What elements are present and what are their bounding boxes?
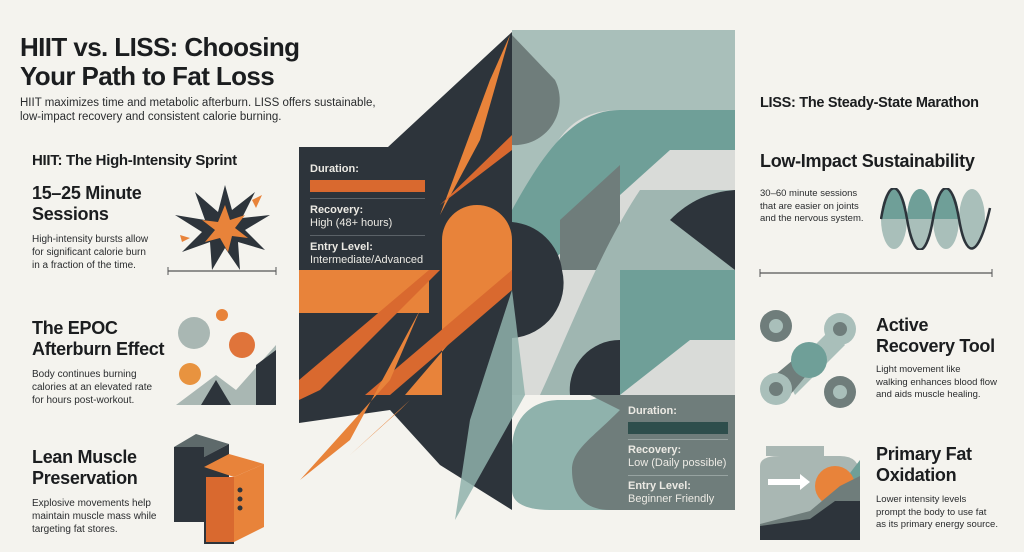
- block: primary fat: as its primary energy source.: [876, 519, 998, 530]
- subtitle: low-impact recovery and consistent calorie burning.: [20, 111, 281, 123]
- HIIT info box: [310, 163, 425, 266]
- block: low-impact: 30–60 minute sessions: [760, 188, 857, 199]
- block: lean muscle: [32, 447, 156, 535]
- block: primary fat: [876, 444, 998, 530]
- title: [20, 32, 299, 91]
- block: EPOC: calories at an elevated rate: [32, 382, 152, 393]
- block: lean muscle: maintain muscle mass while: [32, 511, 156, 522]
- title: Your Path to Fat Loss: [20, 61, 274, 91]
- block: lean muscle: Preservation: [32, 468, 137, 488]
- HIIT info box: High (48+ hours): [310, 217, 392, 229]
- heading: HIIT: HIIT: The High-Intensity Sprint: [32, 152, 237, 169]
- block: primary fat: prompt the body to use fat: [876, 506, 986, 518]
- scale line: [168, 267, 276, 275]
- block: EPOC: Body continues burning: [32, 369, 137, 380]
- block: active recovery: walking enhances blood flow: [876, 376, 997, 388]
- title: HIIT vs. LISS: Choosing: [20, 32, 299, 62]
- heading: LISS: LISS: The Steady-State Marathon: [760, 95, 979, 111]
- icon: chain: [760, 310, 856, 408]
- block: lean muscle: targeting fat stores.: [32, 524, 118, 535]
- block: 15-25 minute: [32, 183, 148, 271]
- HIIT info box: Entry Level:: [310, 241, 373, 253]
- block: 15-25 minute: 15–25 Minute: [32, 183, 141, 203]
- LISS info box: Beginner Friendly: [628, 493, 714, 505]
- subtitle: HIIT maximizes time and metabolic afterburn. LISS offers sustainable,: [20, 97, 376, 109]
- HIIT info box: Duration:: [310, 163, 359, 175]
- LISS info box: Duration:: [628, 405, 677, 417]
- block: primary fat: Lower intensity levels: [876, 494, 966, 505]
- icon: blocks: [174, 434, 264, 544]
- block: low-impact: and the nervous system.: [760, 213, 864, 224]
- block: 15-25 minute: High-intensity bursts allow: [32, 234, 148, 245]
- block: primary fat: Primary Fat: [876, 444, 972, 464]
- HIIT info box: Recovery:: [310, 204, 363, 216]
- bottom teal shape: [512, 395, 735, 510]
- block: active recovery: [876, 315, 997, 400]
- subtitle: [20, 97, 376, 123]
- HIIT info box: Intermediate/Advanced: [310, 254, 423, 266]
- block: EPOC: for hours post-workout.: [32, 395, 134, 406]
- block: primary fat: Oxidation: [876, 465, 956, 485]
- block: 15-25 minute: in a fraction of the time.: [32, 260, 136, 271]
- central graphic: [299, 30, 735, 520]
- block: active recovery: Light movement like: [876, 364, 960, 375]
- icon: wave: [880, 188, 992, 250]
- LISS info box: Entry Level:: [628, 480, 691, 492]
- block: lean muscle: Explosive movements help: [32, 498, 151, 509]
- block: active recovery: and aids muscle healing.: [876, 389, 981, 400]
- block: active recovery: Active: [876, 315, 928, 335]
- icon: fat oxidation jar: [760, 446, 860, 540]
- LISS info box: Recovery:: [628, 444, 681, 456]
- scale line: [760, 269, 992, 277]
- block: lean muscle: Lean Muscle: [32, 447, 137, 467]
- block: active recovery: Recovery Tool: [876, 336, 995, 356]
- block: EPOC: [32, 318, 164, 406]
- block: low-impact: [760, 151, 975, 224]
- LISS info box: Low (Daily possible): [628, 457, 726, 469]
- block: 15-25 minute: Sessions: [32, 204, 109, 224]
- dark shape: [299, 32, 512, 510]
- block: 15-25 minute: for significant calorie burn: [32, 247, 146, 258]
- icon: EPOC circles and peaks: [176, 309, 276, 405]
- LISS info box: [628, 405, 728, 505]
- block: low-impact: that are easier on joints: [760, 200, 859, 212]
- light panel: [455, 30, 735, 520]
- block: low-impact: Low-Impact Sustainability: [760, 151, 975, 171]
- icon: explosion: [175, 185, 270, 270]
- block: EPOC: The EPOC: [32, 318, 118, 338]
- block: EPOC: Afterburn Effect: [32, 339, 164, 359]
